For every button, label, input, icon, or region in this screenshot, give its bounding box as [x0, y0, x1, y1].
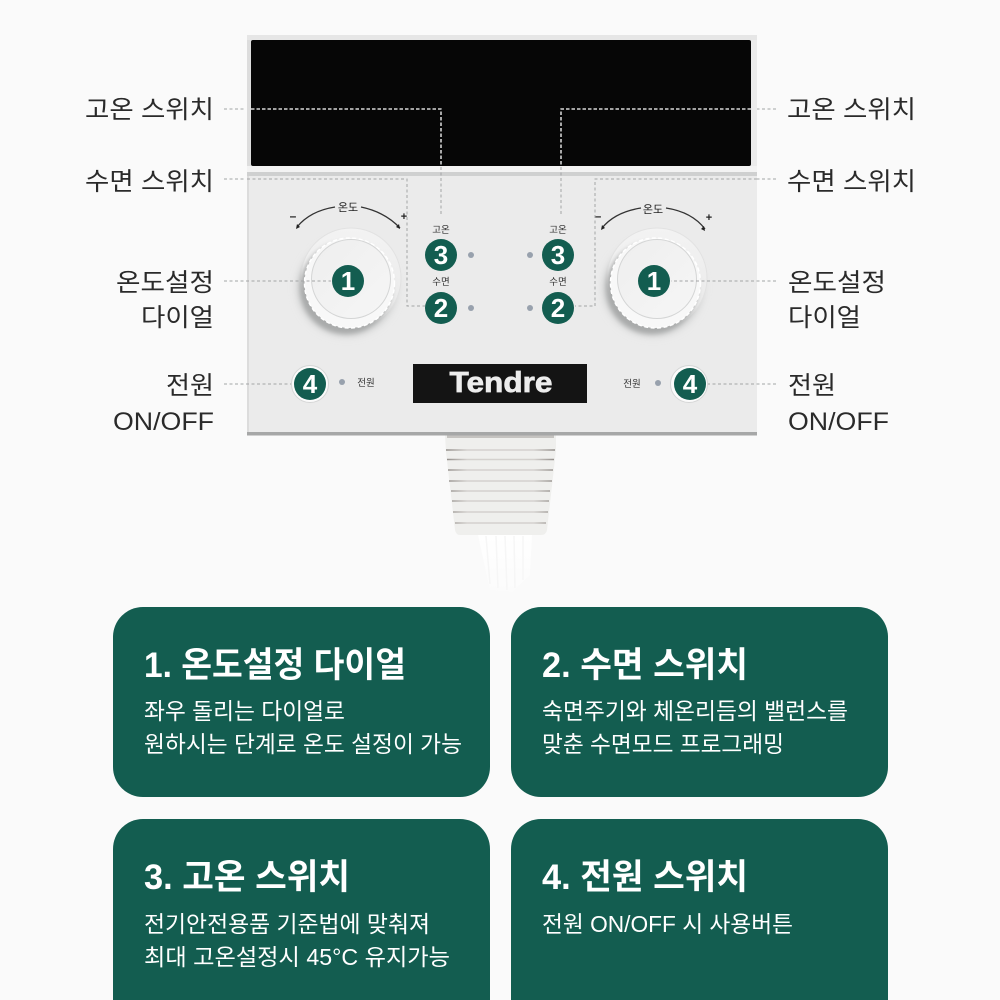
badge 4 right — [670, 366, 708, 402]
card 3: 최대 고온설정시 45°C 유지가능 — [144, 944, 450, 970]
left callout labels: 전원 — [166, 372, 214, 400]
left callout labels: 고온 스위치 — [85, 96, 214, 124]
card 1 — [113, 607, 490, 797]
card 2: 맞춘 수면모드 프로그래밍 — [542, 731, 784, 757]
right dial — [603, 228, 707, 336]
left callout labels: 수면 스위치 — [85, 168, 214, 196]
card 3 — [113, 819, 490, 1000]
small switch labels — [357, 225, 641, 390]
left temperature arc: – — [290, 209, 297, 223]
badge 4 left: 4 — [303, 369, 318, 399]
right callout labels — [787, 96, 916, 436]
badge 4 left — [292, 366, 328, 402]
right callout labels: 수면 스위치 — [787, 168, 916, 196]
controller device — [247, 35, 757, 436]
badge 1 left — [332, 265, 364, 297]
badge 2 left: 2 — [434, 293, 448, 323]
small switch labels: 전원 — [357, 378, 375, 389]
left callout labels: 온도설정 — [116, 269, 214, 297]
right callout labels: 온도설정 — [788, 269, 886, 297]
white leader lines over black panel — [251, 109, 751, 166]
card 4: 전원 ON/OFF 시 사용버튼 — [542, 911, 793, 937]
badge 3 left: 3 — [434, 240, 448, 270]
left temperature arc: 온도 — [338, 201, 358, 214]
right temperature arc — [595, 203, 712, 231]
left dial — [297, 228, 401, 336]
badge 3 left — [425, 239, 457, 271]
left temperature arc: + — [401, 211, 407, 223]
card 3: 전기안전용품 기준법에 맞춰져 — [144, 911, 430, 937]
black cover panel — [251, 40, 751, 166]
right callout labels: ON/OFF — [788, 408, 889, 436]
card 4 — [511, 819, 888, 1000]
small switch labels: 수면 — [432, 277, 450, 288]
right temperature arc: + — [706, 212, 712, 224]
badge 2 left — [425, 292, 457, 324]
badge 1 right: 1 — [647, 266, 661, 296]
card 1: 1. 온도설정 다이얼 — [144, 646, 406, 685]
dashed leader lines — [224, 109, 776, 384]
small switch labels: 고온 — [432, 225, 450, 236]
card 2 — [511, 607, 888, 797]
indicator lights — [339, 252, 661, 386]
right temperature arc: 온도 — [643, 203, 663, 216]
cable strain relief — [445, 435, 556, 592]
right callout labels: 다이얼 — [788, 304, 861, 332]
wires — [478, 535, 532, 592]
card 2: 2. 수면 스위치 — [542, 646, 748, 685]
right callout labels: 고온 스위치 — [787, 96, 916, 124]
badge 1 right — [638, 265, 670, 297]
card 3: 3. 고온 스위치 — [144, 858, 350, 897]
left callout labels — [85, 96, 214, 436]
badge 3 right — [542, 239, 574, 271]
device body — [247, 35, 757, 435]
Tendre logo plate: Tendre — [450, 367, 552, 399]
badge 1 left: 1 — [341, 266, 355, 296]
card 1: 원하시는 단계로 온도 설정이 가능 — [144, 731, 462, 757]
badge 4 right: 4 — [683, 369, 698, 399]
left temperature arc — [290, 201, 407, 229]
right callout labels: 전원 — [788, 372, 836, 400]
small switch labels: 고온 — [549, 225, 567, 236]
badge 3 right: 3 — [551, 240, 565, 270]
small switch labels: 수면 — [549, 277, 567, 288]
small switch labels: 전원 — [623, 379, 641, 390]
Tendre logo plate — [413, 364, 587, 403]
right temperature arc: – — [595, 209, 602, 223]
card 4: 4. 전원 스위치 — [542, 858, 748, 897]
badge 2 right: 2 — [551, 293, 565, 323]
left callout labels: ON/OFF — [113, 408, 214, 436]
number badges — [292, 239, 708, 402]
card 2: 숙면주기와 체온리듬의 밸런스를 — [542, 698, 848, 724]
card 1: 좌우 돌리는 다이얼로 — [144, 698, 345, 724]
left callout labels: 다이얼 — [141, 304, 214, 332]
badge 2 right — [542, 292, 574, 324]
